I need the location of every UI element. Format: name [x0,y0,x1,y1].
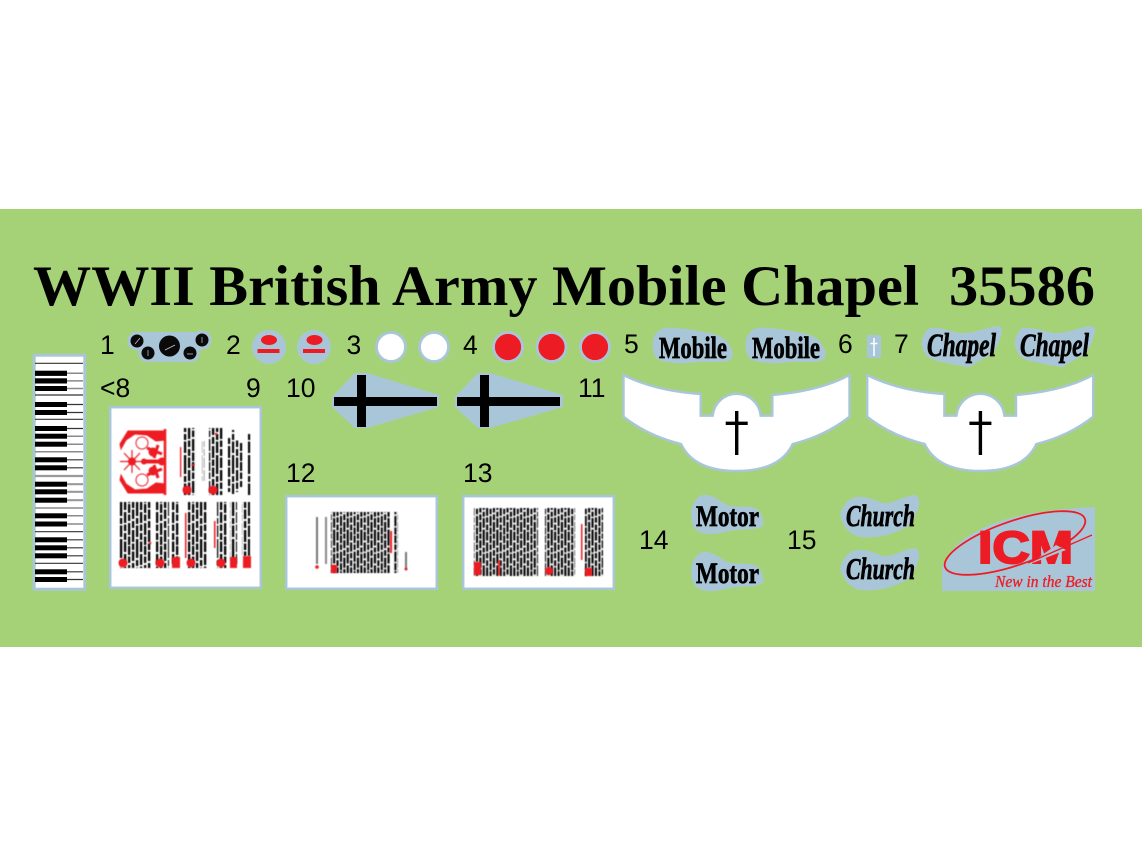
decal 4: red circles [494,332,610,362]
label 8: <8 [100,373,130,403]
decal 7: Chapel lettering: Chapel [927,328,997,364]
decal 13: printed page [463,496,614,589]
label 10: 10 [286,373,315,403]
ICM logo [938,498,1095,591]
red ornament [120,429,166,495]
decal 5: Mobile lettering: Mobile [752,330,820,365]
green background panel [0,209,1142,647]
decal 14: Motor lettering: Motor [696,557,759,590]
decal 7: Chapel lettering [922,326,1095,367]
label 15: 15 [787,525,816,555]
label 6: 6 [838,329,853,359]
decal 14: Motor lettering [691,495,763,591]
decal 14: Motor lettering: Motor [696,500,759,533]
label 9: 9 [246,373,261,403]
decal 15: Church lettering: Church [846,551,915,586]
label 13: 13 [463,458,492,488]
label 1: 1 [100,330,115,360]
decal: left winged panel with cross [624,375,850,471]
label 11: 11 [578,373,606,403]
decal 15: Church lettering [840,495,919,590]
title: WWII British Army Mobile Chapel [33,255,919,318]
decal 12: printed page [286,496,437,589]
decal 1: instrument gauges [128,330,212,362]
decal: right winged panel with cross [867,375,1093,471]
ICM logo: New in the Best [994,572,1093,591]
decal 7: Chapel lettering: Chapel [1020,328,1090,364]
decal 3: white circles [376,332,448,362]
label 3: 3 [346,330,361,360]
kit number: 35586 [949,255,1095,318]
decal 5: Mobile lettering [653,328,826,365]
label 12: 12 [286,458,315,488]
decal 11: black cross on blue [455,373,563,428]
ICM logo: ICM [978,522,1073,573]
decal 15: Church lettering: Church [846,498,915,533]
decal 2: red oval and bar roundels [252,330,331,364]
decal: piano keyboard [34,355,85,589]
decal 9: printed page with ornament [110,407,261,588]
label 4: 4 [463,330,478,360]
label 2: 2 [226,330,241,360]
red initials and rubrics [118,433,251,568]
text columns [119,428,250,568]
label 14: 14 [639,525,668,555]
label 5: 5 [624,329,639,359]
decal 10: black cross on blue [332,373,439,428]
decal 6: small white cross [867,335,881,358]
decal 5: Mobile lettering: Mobile [659,330,727,365]
label 7: 7 [894,329,909,359]
